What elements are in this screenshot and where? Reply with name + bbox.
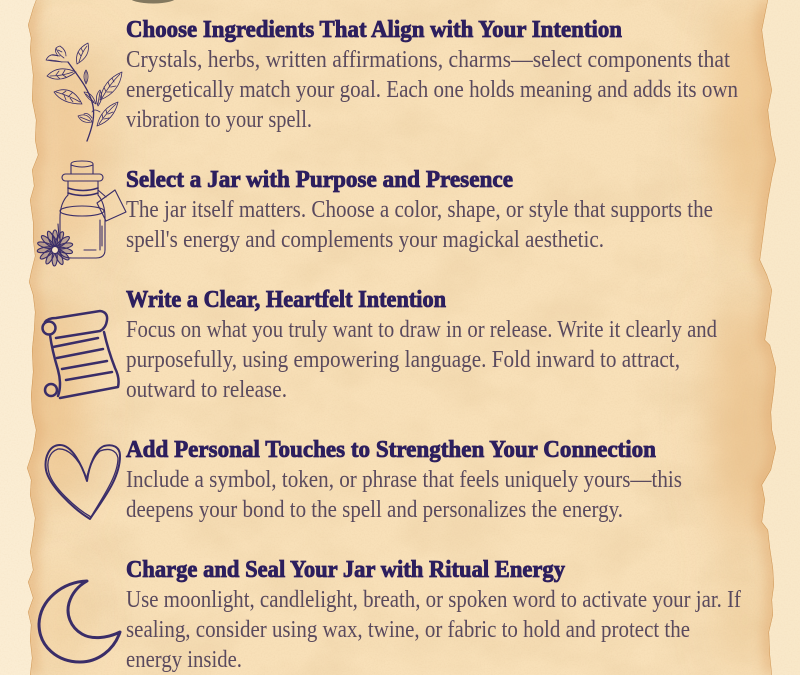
icon: partial dark seal at top edge bbox=[129, 0, 177, 4]
body text: The jar itself matters. Choose a color, shape, or style that supports the bbox=[126, 197, 713, 223]
icon: crescent moon bbox=[39, 581, 120, 662]
body text bbox=[126, 587, 741, 673]
icon: sketched heart bbox=[46, 445, 120, 519]
step 3: intention bbox=[42, 287, 717, 403]
step 2: jar bbox=[37, 161, 713, 266]
body text: sealing, consider using wax, twine, or fabric to hold and protect the bbox=[126, 617, 690, 643]
body text bbox=[126, 47, 738, 133]
heading: Select a Jar with Purpose and Presence bbox=[126, 167, 513, 193]
body text bbox=[126, 467, 682, 523]
step 1: ingredients bbox=[46, 17, 738, 141]
body text bbox=[126, 197, 713, 253]
body text: deepens your bond to the spell and personalizes the energy. bbox=[126, 497, 623, 523]
icon: herb sprig bbox=[46, 43, 122, 141]
icon: bottle with tag and flower bbox=[37, 161, 126, 266]
body text: spell's energy and complements your magickal aesthetic. bbox=[126, 227, 604, 253]
body text bbox=[126, 317, 717, 403]
body text: vibration to your spell. bbox=[126, 107, 312, 133]
body text: Include a symbol, token, or phrase that feels uniquely yours—this bbox=[126, 467, 682, 493]
heading: Charge and Seal Your Jar with Ritual Energy bbox=[126, 557, 565, 583]
icon: scroll bbox=[42, 311, 119, 398]
heading: Choose Ingredients That Align with Your Intention bbox=[126, 17, 622, 43]
body text: outward to release. bbox=[126, 377, 287, 403]
body text: Crystals, herbs, written affirmations, charms—select components that bbox=[126, 47, 730, 73]
body text: purposefully, using empowering language. Fold inward to attract, bbox=[126, 347, 680, 373]
body text: energy inside. bbox=[126, 647, 242, 673]
step 4: personal touches bbox=[46, 437, 682, 523]
heading: Add Personal Touches to Strengthen Your Connection bbox=[126, 437, 656, 463]
step 5: charge and seal bbox=[39, 557, 741, 673]
heading: Write a Clear, Heartfelt Intention bbox=[126, 287, 446, 313]
body text: Focus on what you truly want to draw in or release. Write it clearly and bbox=[126, 317, 717, 343]
